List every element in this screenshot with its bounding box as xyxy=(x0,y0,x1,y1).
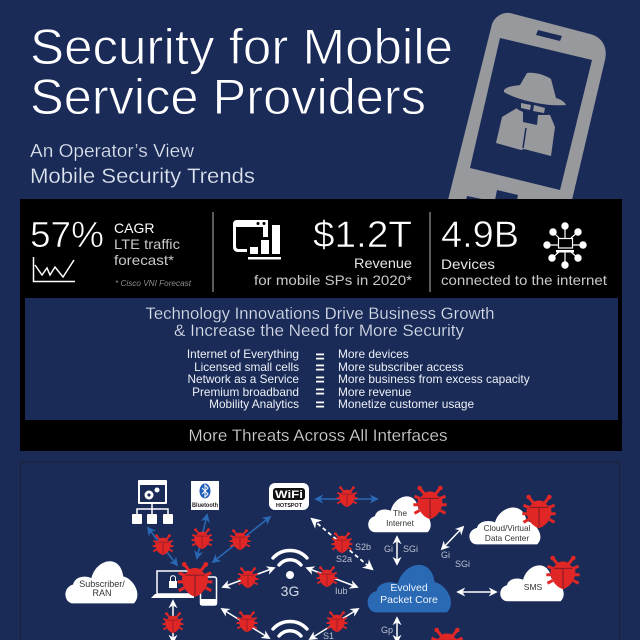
icon: phone with spy xyxy=(448,13,606,200)
interface labels: Iub xyxy=(335,586,348,596)
banner: more threats: More Threats Across All Interfaces xyxy=(188,427,448,445)
title: Security for Mobile xyxy=(30,19,453,75)
list: outcomes: More business from excess capacity xyxy=(338,372,530,386)
icon: wifi lower xyxy=(273,622,307,636)
interface labels: S2a xyxy=(336,554,352,564)
stat: 57% CAGR: 57% xyxy=(30,214,104,255)
interface labels: S2b xyxy=(355,542,371,552)
title xyxy=(30,19,453,125)
icon: wifi hotspot: HOTSPOT xyxy=(276,503,303,509)
cloud: the internet: Internet xyxy=(386,519,415,528)
cloud: subscriber RAN xyxy=(65,561,137,603)
stat: 4.9B devices: Devices xyxy=(441,256,495,272)
list: equals signs: = xyxy=(315,397,325,414)
list: outcomes: More subscriber access xyxy=(338,360,464,374)
icon: wifi 3G: 3G xyxy=(281,583,299,599)
interface labels: Gi xyxy=(384,544,393,554)
arrows: white links xyxy=(173,519,496,640)
subtitle: An Operator’s View xyxy=(30,141,195,161)
cloud: evolved packet core: Packet Core xyxy=(380,594,438,606)
icon: app hierarchy xyxy=(132,480,173,524)
cloud: subscriber RAN: Subscriber/ xyxy=(79,579,125,589)
icon: wifi hotspot: WiFi xyxy=(275,489,303,501)
list: outcomes: More devices xyxy=(338,347,409,361)
interface labels: Gi xyxy=(441,550,450,560)
cloud: evolved packet core xyxy=(368,565,451,612)
interface labels xyxy=(323,542,470,640)
cloud: cloud virtual data center xyxy=(469,508,540,544)
subtitle xyxy=(30,141,255,188)
list: equals signs: = xyxy=(315,372,325,389)
threat bugs xyxy=(153,486,580,640)
stat: 57% CAGR: * Cisco VNI Forecast xyxy=(115,279,192,288)
icon: main bug on laptop xyxy=(178,562,212,597)
stat: $1.2T revenue: $1.2T xyxy=(313,214,412,255)
cloud: subscriber RAN: RAN xyxy=(92,588,112,598)
stat: 57% CAGR: forecast* xyxy=(114,252,175,268)
icon: wifi 3G xyxy=(273,550,307,599)
list: technologies: Network as a Service xyxy=(188,372,299,386)
stat: $1.2T revenue xyxy=(213,212,413,292)
icon: connected devices xyxy=(544,223,586,268)
list: equals signs xyxy=(315,349,325,414)
stat: 4.9B devices: connected to the internet xyxy=(441,272,607,288)
stat: 57% CAGR xyxy=(30,214,192,288)
panel: threat diagram xyxy=(20,462,620,640)
cloud: the internet: The xyxy=(393,509,408,518)
stat: $1.2T revenue: for mobile SPs in 2020* xyxy=(254,272,413,288)
icon: wifi hotspot xyxy=(269,483,309,510)
stat: 4.9B devices: 4.9B xyxy=(441,214,519,255)
list: technologies: Internet of Everything xyxy=(187,347,299,361)
heading: innovations: Technology Innovations Drive Business Growth xyxy=(146,305,494,323)
interface labels: Gp xyxy=(381,625,393,635)
stat: 57% CAGR: LTE traffic xyxy=(114,236,180,252)
cloud: SMS: SMS xyxy=(524,582,543,592)
list: outcomes xyxy=(338,347,530,411)
icon: bluetooth xyxy=(191,481,219,510)
interface labels: SGi xyxy=(455,559,470,569)
list: equals signs: = xyxy=(315,360,325,377)
stat: $1.2T revenue: Revenue xyxy=(354,255,412,271)
icon: bluetooth: Bluetooth xyxy=(192,502,218,509)
list: equals signs: = xyxy=(315,384,325,401)
title: Service Providers xyxy=(30,69,426,125)
panel: technology innovations xyxy=(25,298,618,420)
list: technologies: Premium broadband xyxy=(192,385,299,399)
panel: stats and innovations xyxy=(20,199,622,451)
cloud: SMS xyxy=(500,565,564,601)
list: outcomes: More revenue xyxy=(338,385,412,399)
subtitle: Mobile Security Trends xyxy=(30,165,255,188)
cloud: evolved packet core: Evolved xyxy=(390,582,428,594)
cloud: cloud virtual data center: Data Center xyxy=(485,534,529,543)
heading: innovations xyxy=(146,305,494,340)
stat: 57% CAGR: CAGR xyxy=(114,220,154,236)
heading: innovations: & Increase the Need for More Security xyxy=(174,322,465,340)
icon: line chart xyxy=(34,257,75,282)
cloud: the internet xyxy=(368,496,431,532)
interface labels: SGi xyxy=(403,544,418,554)
icon: spy xyxy=(496,73,566,156)
list: outcomes: Monetize customer usage xyxy=(338,397,475,411)
list: equals signs: = xyxy=(315,349,325,366)
arrows: blue links xyxy=(148,499,377,565)
icon: laptop and tablet xyxy=(151,571,217,605)
stat: 4.9B devices xyxy=(430,212,607,292)
list: technologies xyxy=(187,347,299,411)
icon: browser with bars xyxy=(233,220,281,260)
list: technologies: Mobility Analytics xyxy=(209,397,299,411)
cloud: cloud virtual data center: Cloud/Virtual xyxy=(484,524,531,533)
list: technologies: Licensed small cells xyxy=(194,360,299,374)
